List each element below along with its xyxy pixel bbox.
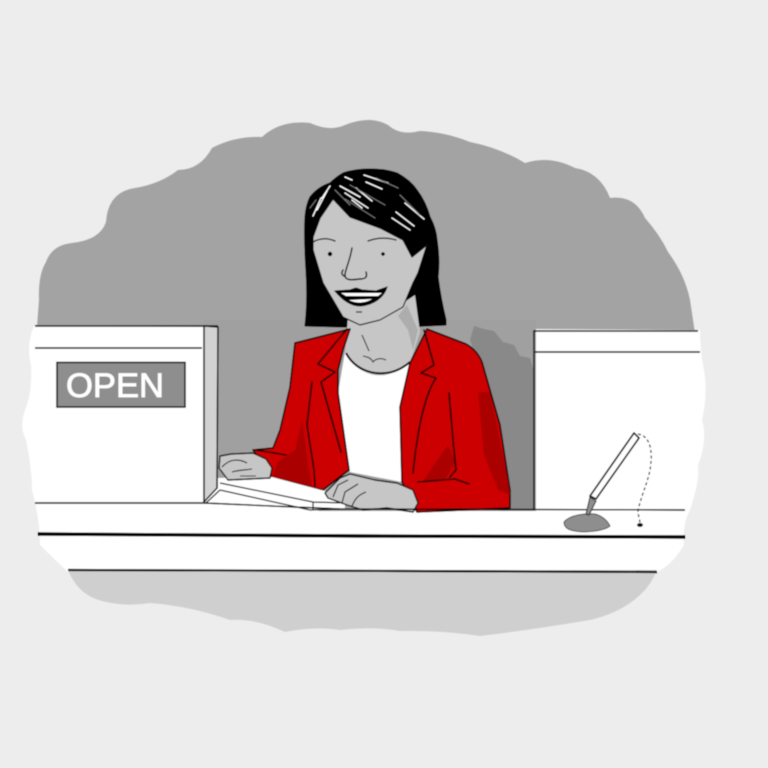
counter front lines [35,503,685,572]
keyboard [206,477,345,511]
background blob: white lower area [22,326,706,572]
background blob: light grey floor [68,570,657,636]
nose [342,248,367,280]
jacket lines [256,329,469,486]
eyes [328,252,385,256]
left hand [219,453,272,480]
mouth [335,287,387,306]
white shirt [338,352,411,482]
sign: OPEN: OPEN [66,367,164,405]
teller [206,169,510,512]
face [313,199,427,325]
neckline [346,353,410,373]
right hand [325,474,418,512]
background blob: dark grey wall [36,120,696,340]
red jacket [253,329,510,512]
neck [345,295,420,376]
right counter box [534,331,700,510]
sign: OPEN [57,362,185,407]
neck shadow [398,305,418,350]
left counter box [35,326,218,502]
shadow behind teller [470,326,534,511]
box side panel [204,326,218,502]
eyebrows [313,238,396,242]
jacket shading [272,392,510,495]
pen stand [564,514,610,532]
pen on a chain [586,433,651,527]
hair back [305,169,446,327]
wall between counter boxes [204,320,536,511]
hair shine [313,175,424,230]
